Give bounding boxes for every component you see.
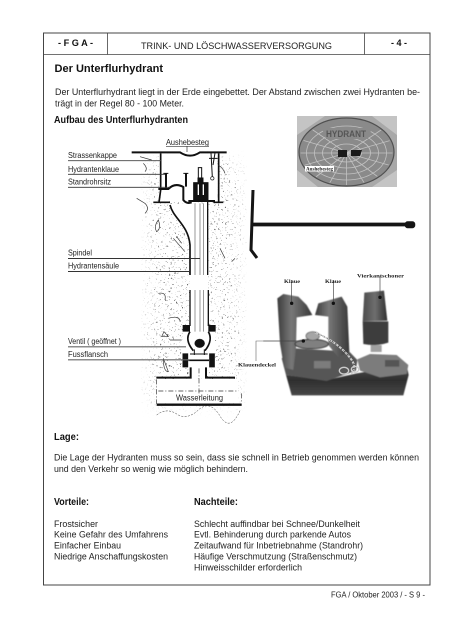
advantages list: Niedrige Anschaffungskosten [54, 552, 168, 562]
photo label: Klaue left: Klaue [284, 279, 301, 285]
diagram label: Fussflansch: Fussflansch [68, 350, 108, 359]
diagram label: Aushebesteg: Aushebesteg [166, 138, 209, 147]
footer: FGA / Oktober 2003 / - S 9 - [331, 590, 425, 600]
page frame [44, 33, 430, 585]
section heading: structure: Aufbau des Unterflurhydranten [54, 115, 188, 126]
diagram label: Spindel [68, 248, 200, 258]
location text [54, 452, 419, 475]
section heading: Lage: Lage: [54, 432, 79, 443]
diagram label: Hydrantensäule: Hydrantensäule [68, 262, 119, 270]
header: chapter number: - 4 - [391, 38, 407, 49]
advantages list: Keine Gefahr des Umfahrens [54, 530, 168, 540]
advantages list [54, 519, 168, 562]
intro paragraph [55, 87, 420, 110]
disadvantages list: Zeitaufwand für Inbetriebnahme (Standrohr) [194, 540, 363, 552]
leader line: Klauendeckel [256, 341, 264, 361]
disadvantages column [194, 497, 363, 574]
location text: Die Lage der Hydranten muss so sein, dass sie schnell in Betrieb genommen werden können [54, 452, 419, 464]
diagram label: Wasserleitung: Wasserleitung [176, 394, 223, 402]
disadvantages list: Hinweisschilder erforderlich [194, 562, 302, 574]
header: organisation: - F G A - [58, 38, 93, 49]
photo label: Vierkantschoner: Vierkantschoner [357, 274, 405, 280]
leader lines [263, 277, 380, 341]
diagram label: Strassenkappe [68, 151, 161, 161]
icon: lifting key tool [251, 190, 415, 258]
hollow interiors [157, 154, 238, 403]
photo: manhole cover: HYDRANT [326, 129, 366, 139]
intro paragraph: trägt in der Regel 80 - 100 Meter. [55, 98, 184, 110]
disadvantages list: Häufige Verschmutzung (Straßenschmutz) [194, 552, 357, 562]
heading: Nachteile: Nachteile: [194, 497, 238, 508]
diagram label: Hydrantensäule [68, 262, 190, 272]
lifting slot [338, 150, 362, 157]
lower hydrant parts [156, 290, 242, 423]
diagram label: Strassenkappe: Strassenkappe [68, 151, 117, 160]
infographic page [43, 32, 430, 598]
title: Der Unterflurhydrant [54, 63, 163, 75]
small stones [137, 157, 235, 262]
base body [286, 365, 409, 395]
hydrant cross-section diagram [130, 150, 252, 423]
advantages list: Einfacher Einbau [54, 540, 121, 552]
photo label: Aushebesteg: Aushebesteg [306, 168, 334, 172]
claw cover [295, 339, 328, 349]
chain [315, 333, 354, 373]
diagram label: Ventil [68, 337, 186, 347]
advantages column [54, 497, 168, 562]
location text: und den Verkehr so wenig wie möglich behindern. [54, 464, 248, 475]
photo: manhole cover [297, 116, 397, 190]
upper hydrant parts [132, 152, 235, 275]
photo: hydrant claws [263, 277, 409, 395]
header: chapter title: TRINK- UND LÖSCHWASSERVERSORGUNG [141, 41, 332, 51]
disadvantages list: Evtl. Behinderung durch parkende Autos [194, 530, 351, 540]
diagram label: Standrohrsitz: Standrohrsitz [68, 178, 111, 186]
advantages list: Frostsicher [54, 519, 99, 530]
disadvantages list: Schlecht auffindbar bei Schnee/Dunkelheit [194, 519, 360, 530]
right claw [315, 297, 349, 357]
square-end protector [363, 291, 387, 321]
diagram label: Spindel: Spindel [68, 248, 92, 258]
cap socket [282, 348, 357, 381]
photo label: Klauendeckel: Klauendeckel [238, 362, 277, 368]
soil speckle [141, 150, 247, 413]
diagram label: Standrohrsitz [68, 178, 170, 187]
heading: Vorteile: Vorteile: [54, 497, 89, 508]
photo label: Klaue right: Klaue [325, 279, 342, 285]
left claw [277, 294, 312, 370]
right platform [357, 354, 408, 377]
diagram label: Fussflansch [68, 350, 190, 360]
diagram label: Ventil: Ventil ( geöffnet ) [68, 337, 121, 346]
diagram label: Hydrantenklaue: Hydrantenklaue [68, 165, 119, 174]
disadvantages list [194, 519, 363, 574]
intro paragraph: Der Unterflurhydrant liegt in der Erde eingebettet. Der Abstand zwischen zwei Hydranten be- [55, 87, 420, 98]
diagram label: Aushebesteg [166, 138, 209, 152]
diagram label: Hydrantenklaue [68, 165, 165, 174]
